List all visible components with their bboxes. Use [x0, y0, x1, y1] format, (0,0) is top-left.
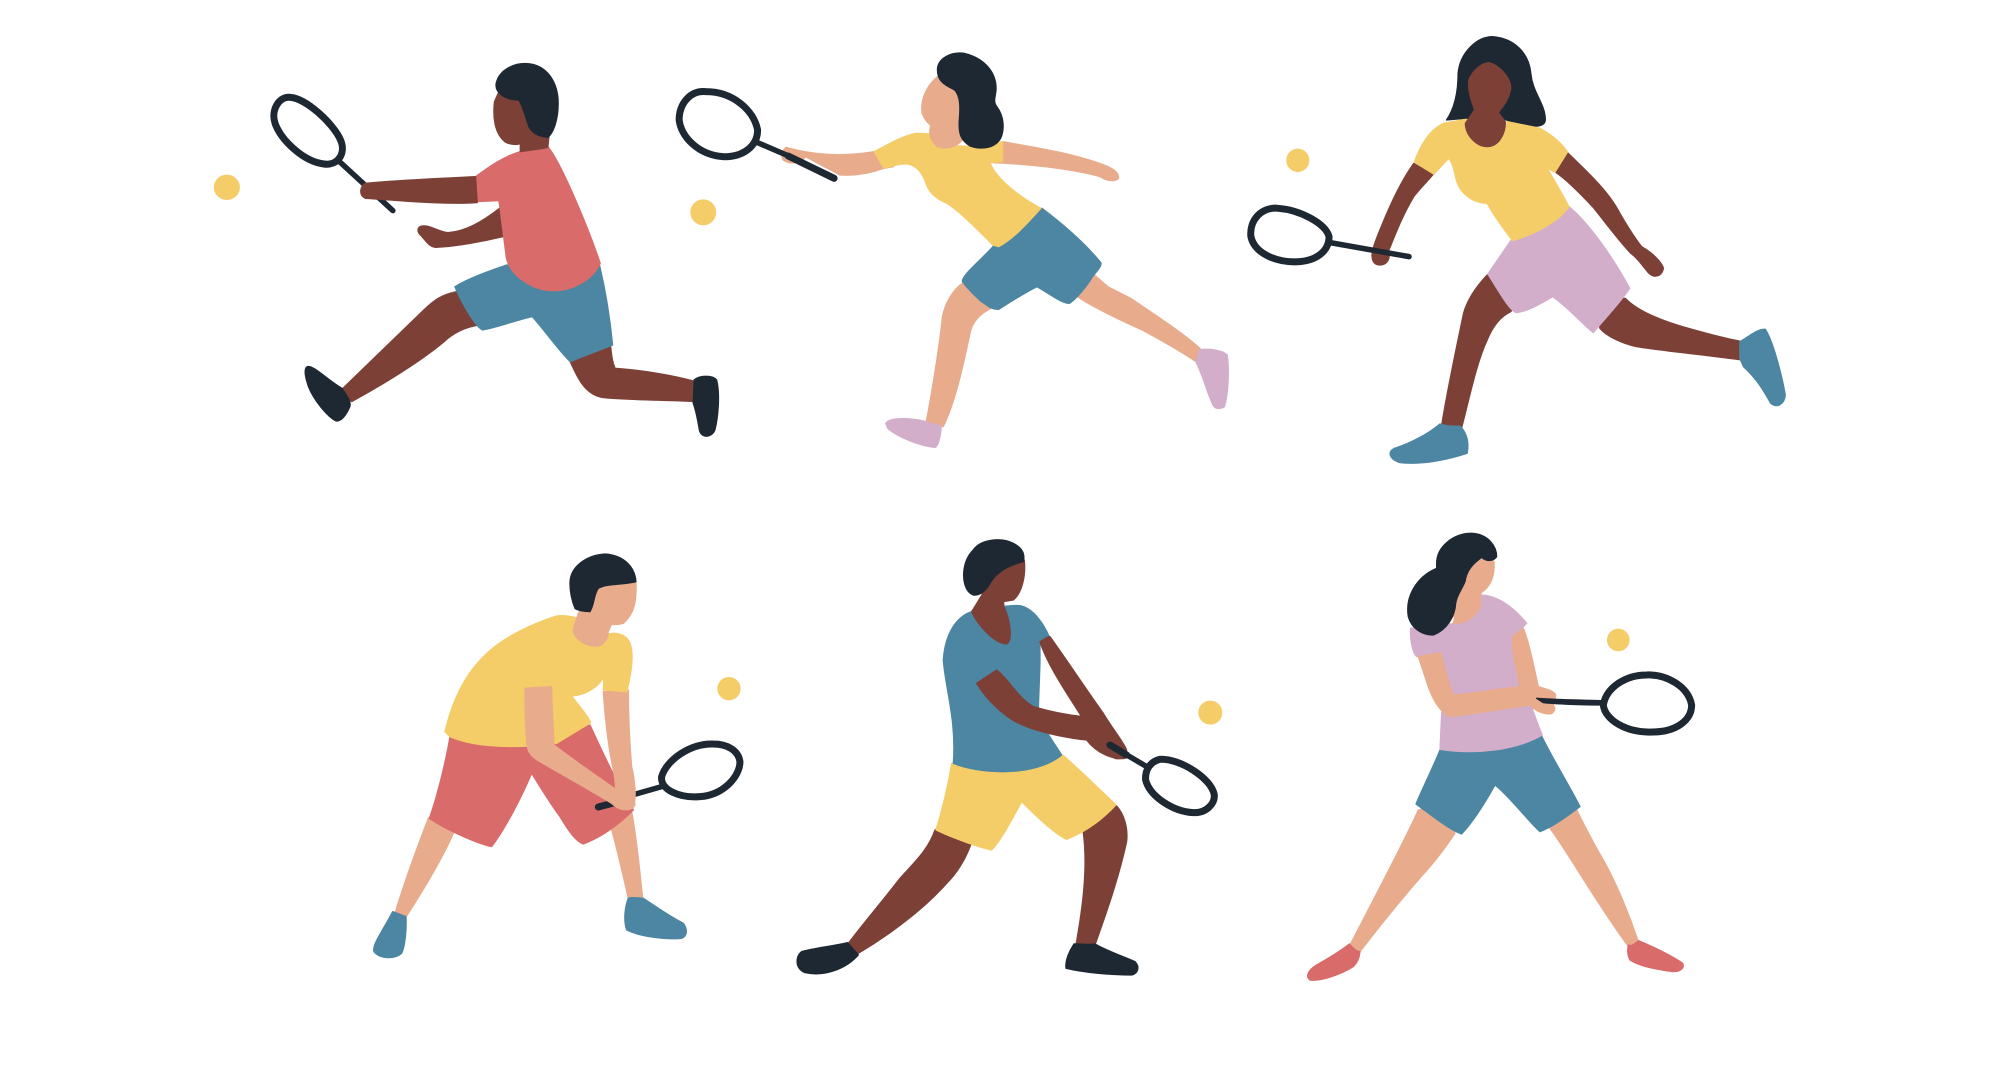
face [980, 560, 1025, 602]
shirt [476, 147, 600, 291]
left leg [1350, 803, 1455, 952]
front arm [977, 670, 1125, 759]
left shoe [886, 419, 941, 447]
racket grip [598, 803, 615, 807]
shirt [1414, 119, 1569, 241]
left arm [1372, 163, 1433, 265]
back leg [1596, 298, 1743, 360]
shuttle ball [718, 678, 740, 700]
front arm [782, 147, 893, 175]
hair [570, 554, 636, 612]
front leg [341, 292, 496, 402]
shorts [1416, 736, 1580, 834]
right shoe [1196, 349, 1228, 408]
figure: man in red shirt lunging [214, 64, 718, 436]
shuttle ball [1608, 629, 1629, 651]
left shoe [305, 367, 350, 421]
hair [937, 53, 1003, 148]
neck [1453, 580, 1481, 623]
front leg [1442, 275, 1527, 427]
racket [1537, 675, 1692, 732]
face [578, 582, 636, 625]
figure: woman in yellow shirt reaching [679, 53, 1228, 447]
right arm [1556, 153, 1663, 276]
front arm [525, 687, 635, 810]
shorts [962, 208, 1101, 309]
shirt [874, 133, 1041, 247]
shorts [429, 725, 633, 847]
face [494, 90, 544, 144]
right lower leg [607, 812, 643, 898]
arms [1418, 628, 1556, 717]
shirt [1411, 595, 1542, 752]
left lower leg [395, 807, 453, 916]
neck [930, 123, 962, 148]
neck [573, 613, 613, 646]
right shoe [1628, 941, 1683, 972]
hair [1446, 37, 1545, 126]
front leg [926, 283, 991, 427]
shorts [936, 755, 1116, 850]
shuttle ball [214, 175, 239, 199]
left shoe [374, 912, 406, 958]
right shoe [1066, 944, 1138, 975]
hair [496, 64, 558, 137]
shirt [445, 616, 632, 746]
figure: woman in pink shirt and blue shorts [1308, 533, 1692, 980]
racket [274, 97, 393, 211]
neck [1465, 110, 1505, 147]
front arm [361, 177, 477, 203]
right leg [1076, 806, 1127, 945]
back arm [989, 142, 1119, 181]
back shoe [1740, 329, 1785, 406]
front shoe [1390, 424, 1468, 463]
shuttle ball [1287, 149, 1309, 171]
racket [1110, 745, 1214, 813]
face [1453, 558, 1494, 617]
neck [972, 592, 1010, 644]
shorts [1488, 207, 1630, 333]
back leg [570, 340, 698, 402]
face [922, 77, 966, 138]
shuttle ball [691, 200, 715, 225]
back arm [603, 690, 635, 810]
right shoe [625, 898, 686, 939]
neck [520, 130, 550, 152]
shirt [943, 606, 1062, 772]
hair [1408, 533, 1497, 635]
left leg [848, 820, 971, 953]
back leg [1066, 270, 1202, 362]
right shoe [693, 376, 718, 436]
racket [627, 744, 740, 797]
left shoe [797, 943, 858, 974]
shorts [455, 265, 613, 362]
hair [964, 540, 1024, 595]
racket [1251, 208, 1409, 262]
back arm [418, 203, 517, 247]
racket [679, 92, 834, 178]
figure: woman in yellow shirt and pink shorts [1251, 37, 1785, 463]
face [1469, 63, 1511, 115]
right leg [1543, 807, 1638, 945]
right arm [1040, 637, 1127, 759]
racket grip [1110, 745, 1127, 755]
left shoe [1308, 944, 1360, 980]
shuttle ball [1199, 701, 1222, 724]
figure: man in blue shirt and yellow shorts [797, 540, 1222, 975]
figure: man in yellow shirt and red shorts [374, 554, 740, 958]
